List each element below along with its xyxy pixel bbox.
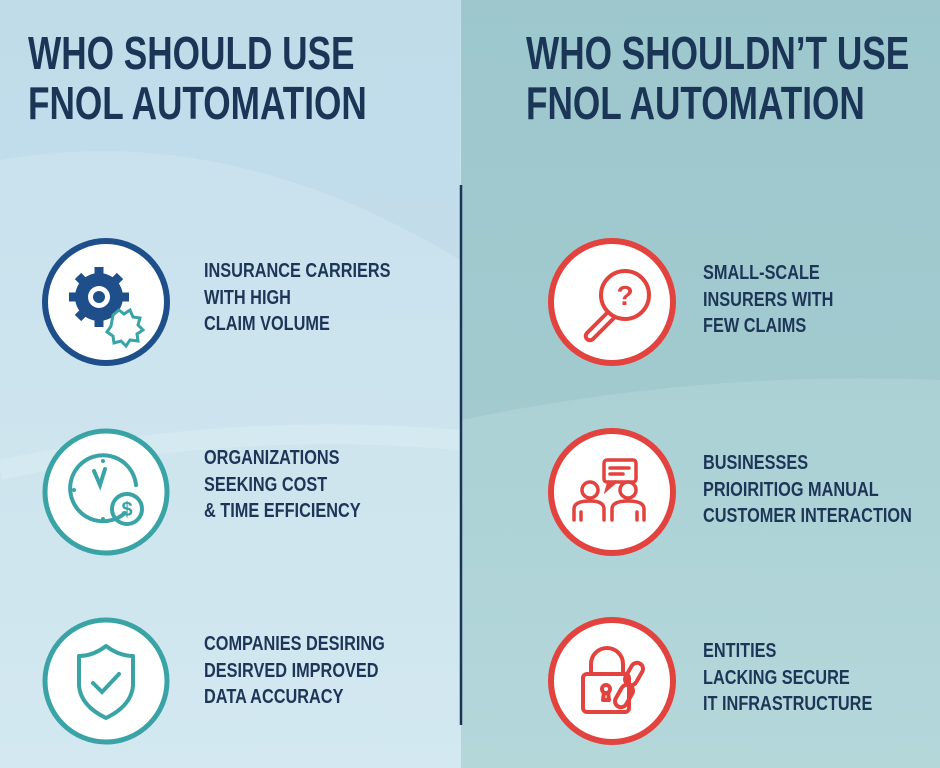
text: entities: IT INFRASTRUCTURE (703, 693, 872, 715)
text: insurance carriers: CLAIM VOLUME (204, 313, 330, 335)
text: insurance carriers (204, 260, 391, 335)
text: organizations: ORGANIZATIONS (204, 447, 340, 469)
text: businesses: CUSTOMER INTERACTION (703, 505, 912, 527)
icon: clock with dollar: $ (121, 499, 133, 521)
text: insurance carriers: INSURANCE CARRIERS (204, 260, 391, 282)
divider (460, 185, 462, 725)
icon: clock with dollar (42, 428, 170, 556)
icon: magnifier question (548, 238, 676, 366)
title: who should use: WHO SHOULD USE (28, 27, 354, 79)
text: small-scale: INSURERS WITH (703, 288, 833, 310)
text: small-scale: SMALL-SCALE (703, 262, 820, 284)
icon: magnifier question: ? (616, 280, 634, 311)
text: businesses: BUSINESSES (703, 452, 808, 474)
text: organizations: & TIME EFFICIENCY (204, 500, 361, 522)
text: small-scale (703, 262, 833, 337)
icon: people chat (548, 428, 676, 556)
title: who shouldn't use (526, 27, 909, 129)
text: companies: COMPANIES DESIRING (204, 633, 385, 655)
text: businesses: PRIOIRITIOG MANUAL (703, 478, 879, 500)
icon: shield (42, 618, 170, 744)
text: companies: DESIRVED IMPROVED (204, 660, 379, 682)
title: who shouldn't use: FNOL AUTOMATION (526, 77, 865, 129)
title: who should use (28, 27, 367, 129)
text: businesses (703, 452, 912, 527)
title: who shouldn't use: WHO SHOULDN’T USE (526, 27, 909, 79)
text: entities: LACKING SECURE (703, 666, 850, 688)
text: organizations (204, 447, 361, 522)
text: organizations: SEEKING COST (204, 474, 327, 496)
text: entities: ENTITIES (703, 640, 776, 662)
icon: gear (42, 238, 170, 366)
text: insurance carriers: WITH HIGH (204, 286, 291, 308)
icon: lock and chain (548, 617, 676, 745)
text: entities (703, 640, 872, 715)
text: companies: DATA ACCURACY (204, 686, 343, 708)
text: small-scale: FEW CLAIMS (703, 315, 806, 337)
text: companies (204, 633, 385, 708)
title: who should use: FNOL AUTOMATION (28, 77, 367, 129)
